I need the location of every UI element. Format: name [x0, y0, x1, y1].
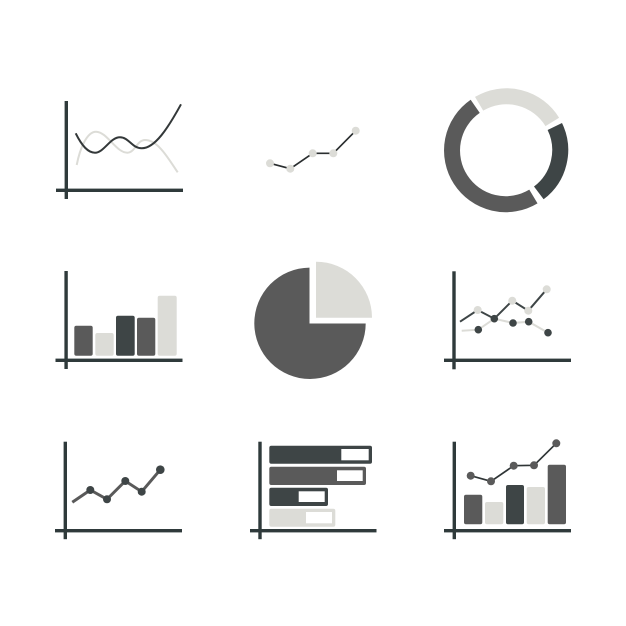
icon: bar chart	[56, 271, 182, 369]
icon: smooth line chart	[56, 101, 183, 199]
icon: line chart with dark dots	[55, 442, 182, 539]
icon: donut chart	[452, 96, 560, 204]
icon: pie chart	[254, 262, 372, 379]
icon: horizontal bar chart	[250, 442, 376, 539]
icon: small line with light dots	[266, 127, 360, 173]
icon: two-series line chart	[444, 271, 571, 369]
icon: combo bar and line chart	[444, 439, 571, 539]
